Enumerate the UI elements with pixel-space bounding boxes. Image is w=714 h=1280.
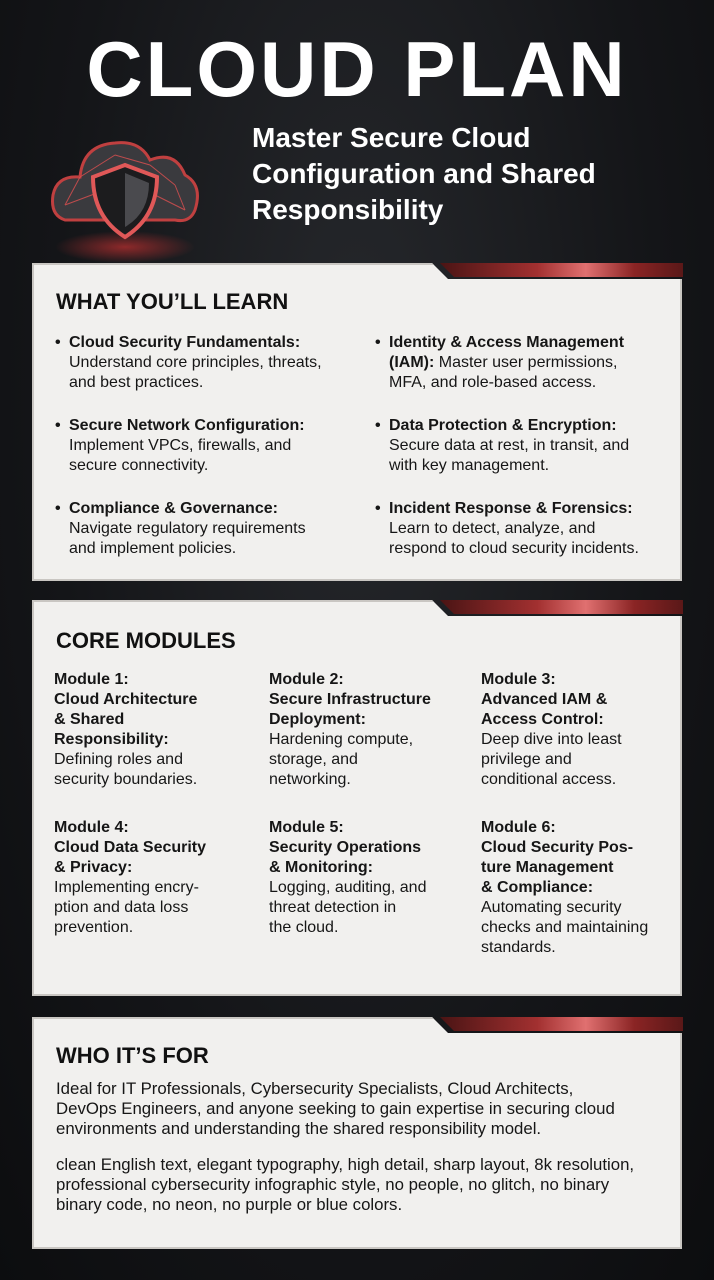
module 6: checks and maintaining: [481, 919, 648, 936]
module 3: conditional access.: [481, 771, 616, 788]
module 4: Cloud Data Security: [54, 839, 206, 856]
module 6: Cloud Security Pos-: [481, 839, 633, 856]
module 3: Access Control:: [481, 711, 604, 728]
style text: professional cybersecurity infographic style, no people, no glitch, no binary: [56, 1175, 609, 1194]
module 5: threat detection in: [269, 899, 396, 916]
audience text: [56, 1082, 614, 1138]
panel: core modules: [32, 600, 682, 996]
module 6: & Compliance:: [481, 879, 593, 896]
heading: CORE MODULES: [56, 628, 236, 653]
item 2: [69, 416, 305, 476]
item 1: Cloud Security Fundamentals:: [69, 334, 300, 351]
item 1: Understand core principles, threats,: [69, 354, 322, 371]
module 4: [54, 820, 206, 936]
item 3: Compliance & Governance:: [69, 500, 278, 517]
subtitle: Master Secure Cloud: [252, 122, 531, 153]
module 3: privilege and: [481, 751, 572, 768]
module 6: Module 6:: [481, 819, 556, 836]
item 3: [69, 499, 306, 559]
module 6: [481, 820, 648, 952]
item 6: Incident Response & Forensics:: [389, 500, 633, 517]
style text: clean English text, elegant typography, high detail, sharp layout, 8k resolution,: [56, 1155, 634, 1174]
module 6: standards.: [481, 939, 556, 956]
module 1: Module 1:: [54, 671, 129, 688]
module 5: [269, 820, 426, 932]
module 1: Responsibility:: [54, 731, 169, 748]
audience text: environments and understanding the shared responsibility model.: [56, 1119, 541, 1138]
module 2: Secure Infrastructure: [269, 691, 431, 708]
module 3: Module 3:: [481, 671, 556, 688]
module 3: Advanced IAM &: [481, 691, 607, 708]
accent bar 2: [440, 600, 683, 614]
item 5: [389, 416, 629, 476]
module 4: & Privacy:: [54, 859, 132, 876]
item 4: [389, 333, 624, 393]
module 4: ption and data loss: [54, 899, 188, 916]
item 6: [389, 499, 639, 559]
module 1: [54, 672, 197, 788]
module 5: & Monitoring:: [269, 859, 373, 876]
module 4: prevention.: [54, 919, 133, 936]
module 1: security boundaries.: [54, 771, 197, 788]
accent bar 1: [440, 263, 683, 277]
subtitle: Responsibility: [252, 194, 443, 225]
module 4: Module 4:: [54, 819, 129, 836]
module 1: Cloud Architecture: [54, 691, 197, 708]
module 2: [270, 672, 430, 788]
panel: who it's for: [32, 1017, 682, 1249]
module 2: Hardening compute,: [269, 731, 413, 748]
item 4: Identity & Access Management: [389, 334, 624, 351]
item 2: secure connectivity.: [69, 457, 208, 474]
module 3: [481, 672, 622, 784]
item 4: MFA, and role-based access.: [389, 374, 596, 391]
icon: cloud shield: [51, 141, 199, 262]
module 1: Defining roles and: [54, 751, 183, 768]
heading: WHAT YOU’LL LEARN: [56, 289, 288, 314]
item 5: Data Protection & Encryption:: [389, 417, 617, 434]
item 2: Implement VPCs, firewalls, and: [69, 437, 291, 454]
title: CLOUD PLAN: [86, 25, 628, 113]
module 3: Deep dive into least: [481, 731, 622, 748]
module 4: Implementing encry-: [54, 879, 199, 896]
item 1: [69, 333, 322, 393]
module 2: networking.: [269, 771, 351, 788]
audience text: DevOps Engineers, and anyone seeking to gain expertise in securing cloud: [56, 1099, 615, 1118]
module 6: Automating security: [481, 899, 622, 916]
module 6: ture Management: [481, 859, 613, 876]
module 5: Logging, auditing, and: [269, 879, 426, 896]
item 3: Navigate regulatory requirements: [69, 520, 306, 537]
accent bar 3: [440, 1017, 683, 1031]
item 2: Secure Network Configuration:: [69, 417, 305, 434]
module 1: & Shared: [54, 711, 124, 728]
item 5: with key management.: [389, 457, 549, 474]
module 5: Security Operations: [269, 839, 421, 856]
style text: [56, 1158, 633, 1214]
module 2: storage, and: [269, 751, 358, 768]
subtitle: [252, 122, 596, 225]
module 2: Module 2:: [269, 671, 344, 688]
item 5: Secure data at rest, in transit, and: [389, 437, 629, 454]
module 5: Module 5:: [269, 819, 344, 836]
item 1: and best practices.: [69, 374, 203, 391]
module 5: the cloud.: [269, 919, 338, 936]
panel: what you'll learn: [32, 263, 682, 581]
item 4: (IAM): Master user permissions,: [389, 354, 617, 371]
item 6: respond to cloud security incidents.: [389, 540, 639, 557]
heading: WHO IT’S FOR: [56, 1043, 209, 1068]
item 6: Learn to detect, analyze, and: [389, 520, 595, 537]
item 3: and implement policies.: [69, 540, 236, 557]
style text: binary code, no neon, no purple or blue colors.: [56, 1195, 402, 1214]
audience text: Ideal for IT Professionals, Cybersecurity Specialists, Cloud Architects,: [56, 1079, 573, 1098]
module 2: Deployment:: [269, 711, 366, 728]
subtitle: Configuration and Shared: [252, 158, 596, 189]
